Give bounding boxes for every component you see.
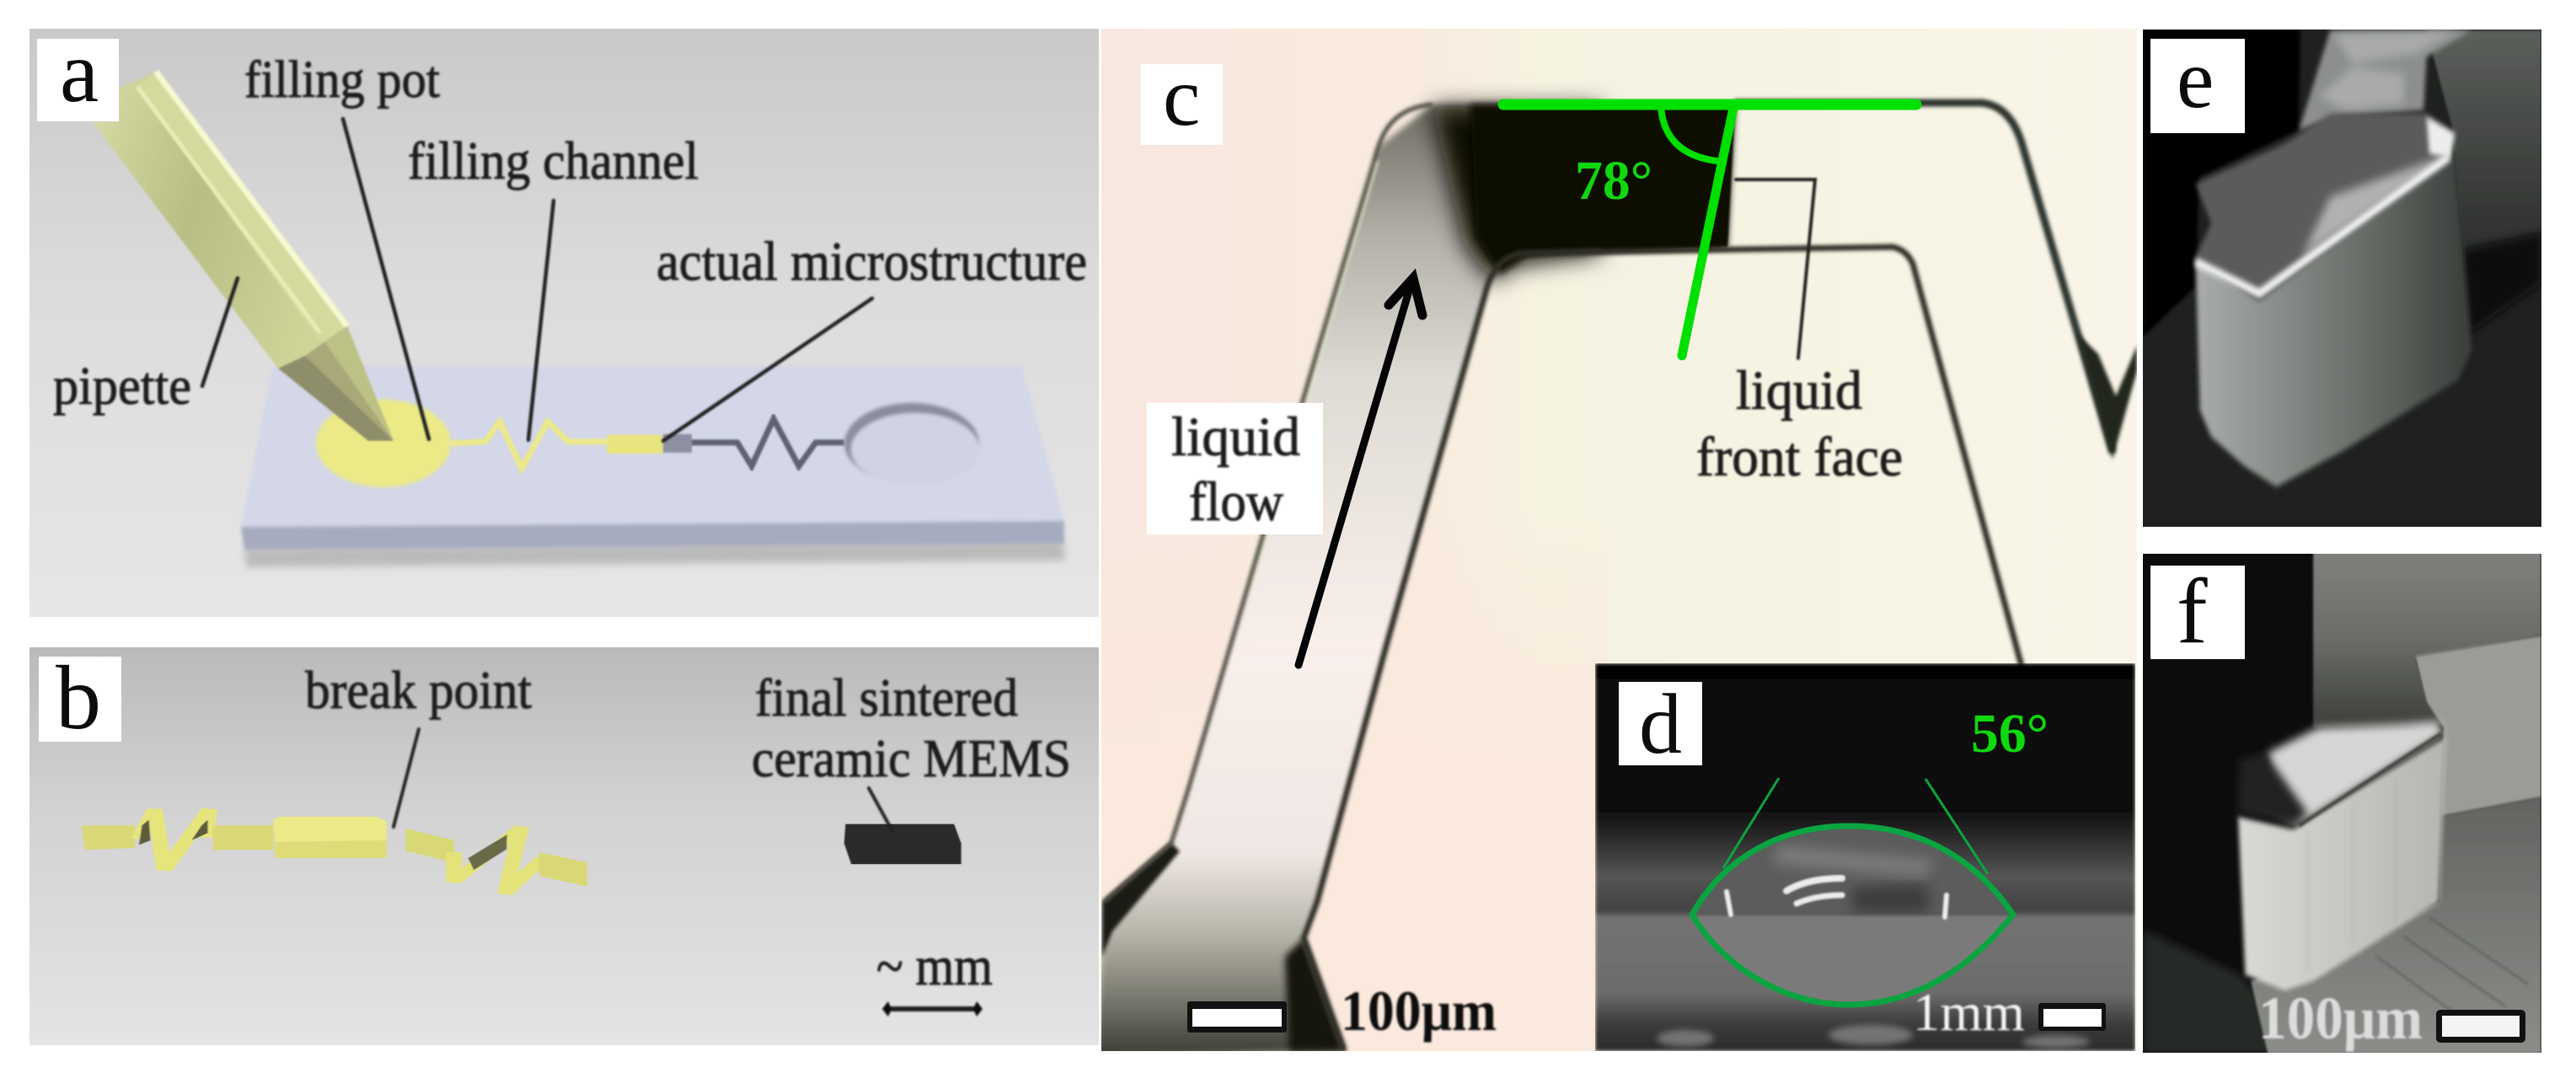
panel b background (29, 647, 1099, 1045)
text: scale: ~ mm (876, 936, 993, 997)
leader: break point (394, 729, 419, 827)
text: final sintered ceramic MEMS: final sintered (755, 668, 1018, 727)
leader: actual microstructure (663, 298, 872, 441)
channel interior shading (1229, 105, 1508, 649)
bright top rim (2196, 157, 2449, 293)
leader: ceramic MEMS (869, 788, 892, 831)
debris highlights (2319, 30, 2458, 110)
filled yellow channel (451, 421, 663, 469)
back shape (2313, 550, 2541, 727)
right floor (2251, 797, 2541, 1054)
leader: pipette (202, 278, 238, 386)
text: liquid front face (1695, 368, 1903, 478)
text: scale c: 100μm (1341, 979, 1497, 1043)
lower-left floor (2143, 931, 2330, 1054)
panel a background (29, 29, 1099, 617)
liquid soft edge (1433, 108, 1601, 282)
channel inner wall (1304, 247, 2022, 1051)
text: liquid front face: liquid (1736, 360, 1862, 421)
liquid right edge (1601, 105, 1735, 251)
label e (2150, 32, 2245, 133)
block front face (2196, 157, 2472, 487)
back wall (2427, 30, 2541, 250)
callout: liquid flow: flow (1189, 471, 1283, 533)
channel bottom-left shading (1095, 649, 1385, 1058)
text: final sintered ceramic MEMS (752, 668, 1071, 788)
exit hole (844, 403, 979, 485)
panel e background (2143, 30, 2541, 527)
pipette (93, 72, 394, 441)
text: break point: break point (305, 660, 532, 720)
arrow: liquid flow direction (1299, 278, 1422, 665)
pink lower background (1520, 745, 1595, 1051)
bright corner (2427, 117, 2455, 158)
text: filling channel: filling channel (408, 131, 699, 190)
panel e: SEM microstructure (2143, 30, 2541, 527)
label e: e (2177, 32, 2214, 126)
leader: liquid front face (1736, 180, 1815, 358)
dark band by the inner wall (1285, 938, 1344, 1051)
block streaks (2307, 778, 2396, 972)
label d (1619, 677, 1702, 772)
double-headed scale arrow (882, 1001, 983, 1017)
panel c: liquid flow micrograph (1095, 29, 2137, 1058)
debris column (2299, 30, 2472, 130)
channel outer wall, left (1104, 105, 1433, 902)
broken yellow structure, left part (82, 809, 387, 870)
panel d background (1595, 663, 2135, 1051)
empty microstructure (663, 419, 844, 466)
block top face (2194, 114, 2455, 300)
label c: c (1163, 50, 1200, 143)
black floor edge (2463, 233, 2541, 334)
scale bar c (1187, 1001, 1287, 1033)
label a (37, 24, 119, 121)
callout: liquid flow (1147, 403, 1323, 534)
droplet reflections (1727, 878, 1947, 917)
floor streaks (2375, 918, 2529, 1026)
filling pot (316, 400, 451, 487)
scale bar f (2436, 1010, 2525, 1043)
dark lower-left edge (1102, 843, 1180, 957)
angle value: 78° (1575, 150, 1652, 212)
contact angle lines (1503, 105, 1916, 356)
substrate plate (241, 366, 1065, 567)
leader: filling channel (528, 201, 554, 440)
surface texture at bottom (1657, 1025, 2090, 1049)
final ceramic part (844, 824, 961, 864)
text: scale d: 1mm (1913, 982, 2025, 1042)
droplet body (1692, 826, 2013, 1005)
angle value: 56° (1971, 703, 2048, 764)
label b (39, 648, 121, 748)
SEM specimen e (2194, 30, 2541, 487)
label f: f (2177, 560, 2208, 663)
SEM specimen f (2143, 550, 2541, 1054)
label f (2150, 560, 2245, 663)
panel b: demoulded part (29, 647, 1099, 1045)
text: actual microstructure: actual microstructure (656, 231, 1087, 292)
text: scale f: 100μm (2258, 984, 2423, 1052)
dark rough end (2238, 753, 2307, 826)
scale bar d (2038, 1003, 2106, 1031)
panel d: droplet contact angle (1595, 663, 2135, 1051)
label d: d (1639, 677, 1682, 772)
text: final sintered ceramic MEMS: ceramic MEMS (752, 728, 1071, 788)
block top face (2268, 722, 2444, 826)
liquid body (1470, 105, 1735, 274)
back wall (2415, 636, 2541, 816)
droplet outline and tangents (1692, 778, 2013, 1005)
panel c background (1101, 29, 2137, 1051)
text: pipette: pipette (53, 356, 191, 416)
channel fold at right (2077, 333, 2137, 459)
label a: a (60, 24, 99, 121)
broken yellow structure, right part (406, 827, 587, 893)
callout: liquid flow: liquid (1171, 406, 1300, 468)
label c (1141, 64, 1223, 145)
panel f background (2143, 554, 2541, 1053)
panel f: SEM microstructure (2143, 550, 2541, 1054)
label b: b (56, 648, 101, 748)
rough lighter patch on top (2302, 157, 2449, 257)
channel outer wall, right (1735, 103, 2113, 453)
dark edge above front face (2299, 734, 2440, 826)
text: liquid front face: front face (1696, 426, 1903, 488)
leader: filling pot (343, 119, 429, 439)
text: filling pot: filling pot (244, 51, 440, 109)
panel a: filling process (29, 24, 1099, 617)
block front face (2238, 737, 2446, 990)
dark upper-left region (2143, 30, 2300, 337)
bright channel wall sheen (1304, 159, 1380, 403)
